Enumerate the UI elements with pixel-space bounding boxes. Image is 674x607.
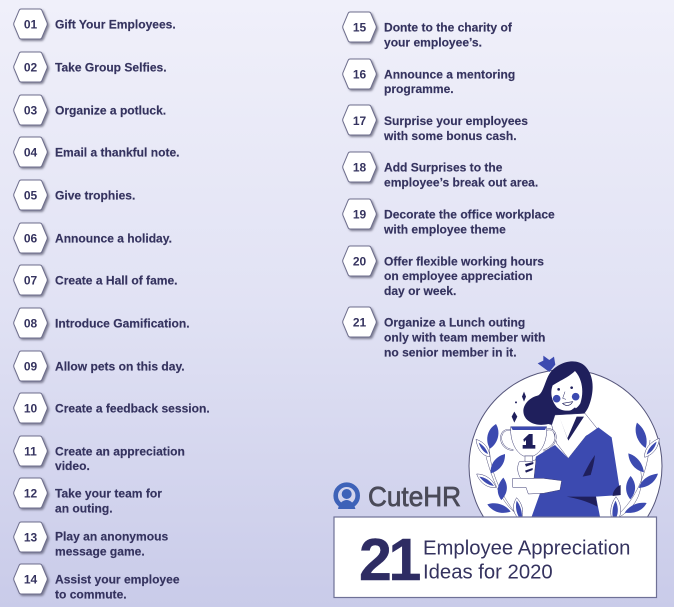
left laurel	[476, 424, 523, 517]
item 19: 19	[353, 208, 366, 222]
item 03: 03	[24, 104, 37, 118]
item 09: 09	[24, 360, 37, 374]
item 17: Surprise your employees	[384, 114, 528, 128]
jacket	[532, 427, 621, 517]
hand and book	[513, 478, 562, 494]
title text: Ideas for 2020	[423, 562, 553, 584]
item 19	[343, 199, 555, 236]
illustration: woman holding trophy	[468, 356, 662, 516]
item 21: Organize a Lunch outing	[384, 316, 525, 330]
item 16	[343, 59, 515, 96]
item 15: your employee’s.	[384, 36, 482, 50]
item 03	[14, 95, 166, 125]
item 21: only with team member with	[384, 330, 545, 344]
item 16: Announce a mentoring	[384, 68, 515, 82]
item 14	[14, 564, 180, 602]
item 08: Introduce Gamification.	[55, 316, 190, 330]
item 12: Take your team for	[55, 486, 162, 500]
item 11: video.	[55, 459, 90, 473]
item 21	[343, 307, 545, 360]
item 21: no senior member in it.	[384, 346, 517, 360]
item 06: 06	[24, 232, 37, 246]
item 07: Create a Hall of fame.	[55, 274, 178, 288]
eyes and smile	[557, 388, 560, 391]
item 02: Take Group Selfies.	[55, 60, 167, 74]
item 19: Decorate the office workplace	[384, 208, 555, 222]
right laurel	[611, 423, 659, 517]
item 09: Allow pets on this day.	[55, 360, 185, 374]
item 19: with employee theme	[383, 222, 506, 236]
item 17: 17	[353, 114, 366, 128]
item 04: 04	[24, 146, 37, 160]
item 06	[14, 223, 172, 253]
item 13	[14, 522, 168, 558]
item 18: 18	[353, 160, 366, 174]
item 20: on employee appreciation	[384, 269, 533, 283]
item 10: 10	[24, 402, 37, 416]
item 01: 01	[24, 18, 37, 32]
item 14: Assist your employee	[55, 572, 180, 586]
item 15	[343, 12, 513, 50]
title text: Employee Appreciation	[423, 538, 630, 560]
face and neck	[551, 371, 582, 411]
item 08	[14, 308, 190, 338]
cheeks	[553, 395, 560, 402]
item 15: 15	[353, 20, 366, 34]
item 16: programme.	[384, 82, 454, 96]
item 20: day or week.	[384, 284, 456, 298]
item 14: 14	[24, 572, 37, 586]
item 04	[14, 137, 180, 167]
item 02: 02	[24, 60, 37, 74]
hair back	[523, 361, 593, 429]
item 12: an outing.	[55, 502, 113, 516]
item 11	[14, 436, 185, 473]
item 15: Donte to the charity of	[384, 20, 513, 34]
item 05: Give trophies.	[55, 188, 135, 202]
item 17	[343, 105, 528, 143]
item 03: Organize a potluck.	[55, 104, 166, 118]
item 07: 07	[24, 274, 37, 288]
item 20: Offer flexible working hours	[384, 254, 544, 268]
item 13: Play an anonymous	[55, 530, 168, 544]
item 14: to commute.	[55, 588, 127, 602]
icon: crown	[538, 356, 555, 372]
item 09	[14, 351, 185, 381]
item 11: Create an appreciation	[55, 444, 185, 458]
shirt collar	[552, 413, 598, 458]
item 10: Create a feedback session.	[55, 402, 210, 416]
item 21: 21	[353, 316, 366, 330]
trophy	[501, 429, 556, 451]
item 08: 08	[24, 316, 37, 330]
item 06: Announce a holiday.	[55, 232, 172, 246]
item 05: 05	[24, 188, 37, 202]
item 04: Email a thankful note.	[55, 146, 180, 160]
item 10	[14, 393, 210, 423]
item 17: with some bonus cash.	[383, 129, 517, 143]
sparkles	[522, 392, 526, 402]
item 12	[14, 478, 162, 516]
trophy number	[523, 434, 535, 449]
item 13: message game.	[55, 544, 145, 558]
item 20	[343, 246, 544, 298]
item 01	[14, 9, 176, 39]
item 18: Add Surprises to the	[384, 160, 503, 174]
title number: 21	[359, 527, 421, 593]
item 16: 16	[353, 68, 366, 82]
item 07	[14, 265, 178, 295]
item 02	[14, 52, 167, 82]
item 05	[14, 180, 135, 210]
title box	[334, 517, 656, 598]
item 13: 13	[24, 530, 37, 544]
item 18	[343, 152, 538, 190]
item 18: employee’s break out area.	[384, 176, 538, 190]
item 11: 11	[24, 444, 37, 458]
item 12: 12	[24, 486, 37, 500]
item 20: 20	[353, 254, 366, 268]
logo: CuteHR: CuteHR	[368, 481, 461, 512]
item 01: Gift Your Employees.	[55, 18, 176, 32]
